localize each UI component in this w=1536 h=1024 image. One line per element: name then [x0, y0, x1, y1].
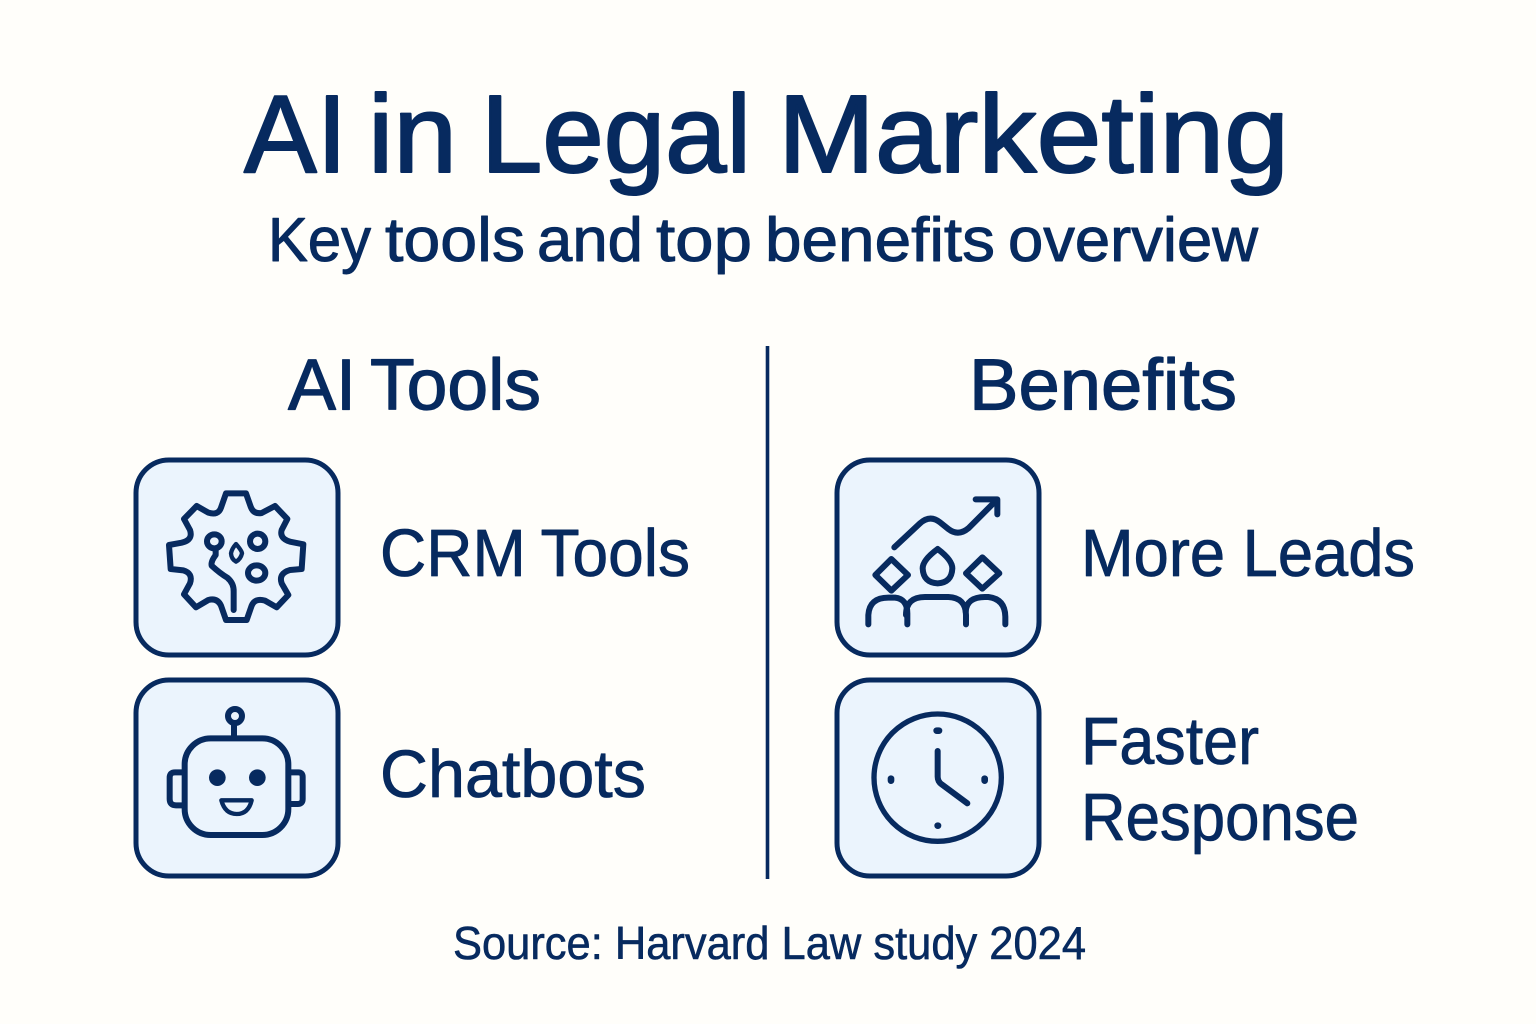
- subtitle: and: [537, 206, 643, 275]
- label: Response: [1081, 780, 1359, 855]
- label: CRM Tools: [380, 516, 690, 591]
- subtitle: tools: [385, 206, 525, 275]
- title: AI: [244, 73, 347, 196]
- icon card: gear with circuit: [136, 460, 338, 655]
- tool item: Chatbots: [136, 680, 646, 876]
- label: Faster: [1081, 704, 1259, 779]
- label: Chatbots: [380, 737, 646, 812]
- title: Legal: [481, 73, 751, 196]
- heading: AI Tools: AI: [288, 346, 356, 426]
- heading: Benefits: Benefits: [969, 346, 1237, 426]
- subtitle: Key: [268, 206, 371, 275]
- title: Marketing: [778, 73, 1289, 196]
- label: More Leads: [1081, 516, 1415, 591]
- tool item: CRM Tools: [136, 460, 690, 655]
- source note: Source: Harvard Law study 2024: [453, 917, 1086, 969]
- icon card: clock: [837, 680, 1039, 876]
- subtitle: overview: [1008, 206, 1258, 275]
- title: in: [368, 73, 457, 196]
- benefit item: More Leads: [837, 460, 1415, 655]
- icon card: robot: [136, 680, 338, 876]
- center divider: [766, 346, 769, 879]
- subtitle: top: [656, 206, 752, 275]
- label: [1081, 704, 1359, 855]
- subtitle: benefits: [765, 206, 995, 275]
- benefit item: Faster Response: [837, 680, 1359, 876]
- icon card: growth arrow and people: [837, 460, 1039, 655]
- heading: AI Tools: Tools: [370, 346, 541, 426]
